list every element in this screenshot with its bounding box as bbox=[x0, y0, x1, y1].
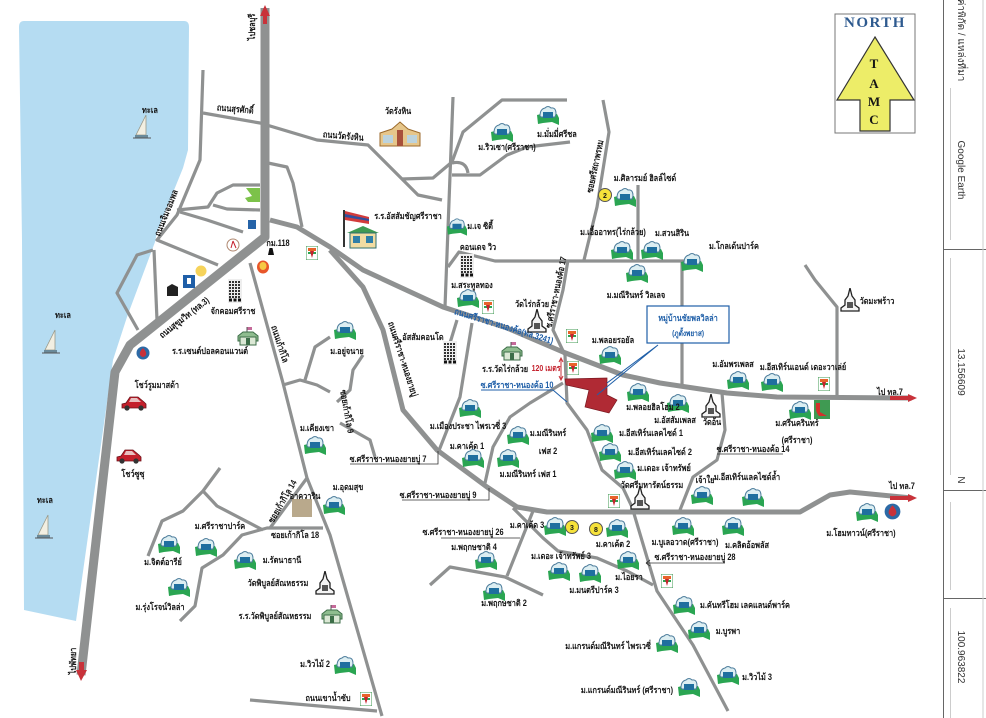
soi 10 blue label bbox=[481, 379, 567, 402]
places: temples and schools: วัดอ้น bbox=[703, 416, 722, 427]
places: housing estates: ม.อยู่จนาย bbox=[330, 346, 364, 357]
icons: fuel, banks and landmarks: คอนเดจ วิว bbox=[460, 242, 497, 252]
north arrow TAMC logo: C bbox=[869, 112, 879, 127]
places: housing estates: ม.เดอะ เจ้าทรัพย์ 3 bbox=[531, 550, 591, 561]
labels: roads: ถนนสุรศักดิ์ bbox=[216, 99, 256, 117]
labels: roads: ซ.ศรีราชา-หนองยายบู่ 9 bbox=[400, 489, 477, 501]
places: housing estates: ม.วิวไม้ 3 bbox=[742, 671, 772, 682]
labels: sea: ทะเล bbox=[142, 105, 158, 115]
icons: sailing boats bbox=[35, 115, 151, 538]
places: housing estates: ม.อีสเทิร์นเลคไซด์ล้ำ bbox=[714, 469, 780, 482]
north arrow TAMC logo: T bbox=[870, 56, 879, 71]
labels: sea bbox=[37, 105, 158, 505]
labels: roads: ถนนศรีราชา-หนองค้อ(ทล.3241) bbox=[453, 306, 555, 346]
places: housing estates: ม.เจ ซิตี้ bbox=[467, 218, 494, 231]
places: housing estates: ม.อีสเทิร์นเลคไซด์ 1 bbox=[619, 427, 683, 438]
places: temples and schools: วัดพิบูลย์สัณหธรรม bbox=[248, 577, 308, 589]
labels: roads: ซ.ศรีราชา-หนองยายบู่ 28 bbox=[655, 551, 736, 563]
icons: fuel, banks and landmarks: โชว์รูมมาสด้า bbox=[134, 379, 179, 391]
places: housing estates: ม.คาเค้ต 2 bbox=[596, 538, 631, 549]
places: housing estates: ม.อัสสัมเพลส bbox=[654, 415, 697, 425]
places: housing estates: ม.อัมพรเพลส bbox=[712, 359, 755, 369]
places: housing estates: ม.โกลเด้นปาร์ค bbox=[709, 240, 759, 251]
places: housing estates: ม.เมืองประชา ไพรเวซี่ 3 bbox=[430, 419, 507, 431]
labels: roads: ถนนเจิมจอมพล bbox=[153, 188, 180, 238]
labels: roads: ถนนศรีราชา-หนองยายบู่ bbox=[385, 320, 420, 398]
project callout box: หมู่บ้านชัยพลวิลล่า bbox=[658, 312, 718, 324]
places: housing estates: ม.ศรีนครินทร์ bbox=[775, 417, 819, 428]
places: housing estates: ม.อีสเทิร์นเลคไซด์ 2 bbox=[628, 446, 692, 457]
places: housing estates: ม.อีสเทิร์นเอนด์ เดอะวาเล่ย์ bbox=[760, 361, 846, 372]
places: temples and schools: ร.ร.วัดไร่กล้วย bbox=[482, 363, 528, 374]
places: housing estates: ม.ไอยรา bbox=[615, 571, 643, 582]
places: housing estates: ม.แกรนด์มณีรินทร์ ไพรเวซี่ bbox=[565, 639, 651, 651]
places: housing estates: ม.มณีรินทร์ bbox=[530, 427, 567, 438]
north arrow TAMC logo: M bbox=[868, 94, 880, 109]
icon: Assumption school with Thai flag bbox=[343, 210, 379, 248]
places: housing estates: ม.ศิลารมย์ ฮิลล์ไซด์ bbox=[614, 172, 676, 183]
places: temples and schools: วัดมะพร้าว bbox=[860, 295, 895, 306]
places: temples and schools bbox=[172, 106, 895, 623]
labels: roads: ถนนเก้ากิโล bbox=[269, 324, 291, 364]
labels: roads: ซ.ศรีราชา-หนองค้อ 17 bbox=[543, 255, 569, 329]
places: housing estates: ม.มณีรินทร์ วิลเลจ bbox=[607, 289, 665, 300]
places: housing estates: ม.มั่มมี่ศรีชล bbox=[537, 127, 577, 139]
places: housing estates: ม.แกรนด์มณีรินทร์ (ศรีราชา) bbox=[581, 684, 673, 695]
places: temples and schools: วัดศรีมหารัตน์ธรรม bbox=[621, 479, 683, 490]
labels: roads: ถนนวัดรังหิน bbox=[322, 130, 364, 143]
north arrow TAMC logo: A bbox=[869, 76, 879, 91]
road network bbox=[117, 70, 912, 716]
labels: sea: ทะเล bbox=[55, 310, 71, 320]
labels: roads: ซอยเก้ากิโล 18 bbox=[271, 529, 319, 540]
sidebar frame and metadata: N bbox=[955, 476, 966, 484]
project callout box bbox=[597, 306, 729, 395]
labels: roads: ถนนเขาน้ำซับ bbox=[305, 690, 351, 703]
icons: fuel, banks and landmarks: 8 bbox=[594, 527, 598, 534]
places: temples and schools: วัดไร่กล้วย bbox=[515, 298, 549, 309]
soi 10 blue label: ซ.ศรีราชา-หนองค้อ 10 bbox=[481, 379, 554, 390]
labels: roads: ถนนสุขุมวิท (ทล.3) bbox=[157, 295, 212, 341]
places: housing estates: ม.คลิตอ้อพลัส bbox=[725, 539, 770, 550]
places: housing estates: ม.เคียงเขา bbox=[300, 422, 334, 433]
icons: condominium towers bbox=[228, 254, 474, 365]
places: housing estates: เจ้าใย bbox=[696, 474, 715, 485]
distance callout: 120 metres bbox=[532, 358, 563, 380]
project callout box: (ภูตั้งพยาส) bbox=[672, 326, 705, 339]
places: housing estates: ม.คาเค้ด 1 bbox=[450, 440, 485, 451]
north arrow TAMC logo: NORTH bbox=[844, 15, 906, 31]
places: housing estates: ม.คันทรีโฮม เลคแลนด์พาร์ค bbox=[700, 599, 790, 610]
labels: sea: ทะเล bbox=[37, 495, 53, 505]
icons: fuel, banks and landmarks: 2 bbox=[603, 193, 607, 200]
places: housing estates: ม.บูเลอวาด(ศรีราชา) bbox=[652, 536, 719, 548]
labels: roads: ซอยเก้ากิโล 14 bbox=[265, 477, 299, 525]
icons: fuel, banks and landmarks bbox=[117, 188, 900, 536]
places: housing estates: ม.รัตนาธานี bbox=[263, 554, 302, 565]
places: housing estates: ม.พลอยรอยัล bbox=[592, 335, 634, 345]
places: housing estates: ม.เอื้ออาทร(ไร่กล้วย) bbox=[580, 224, 646, 237]
places: housing estates: ม.พฤกษชาติ 2 bbox=[481, 598, 527, 608]
project plot bbox=[565, 378, 617, 413]
places: housing estates: ม.รุ่งโรจน์วิลล่า bbox=[135, 601, 185, 613]
soi pointer lines bbox=[350, 451, 783, 566]
distance callout: 120 metres: 120 เมตร bbox=[532, 363, 561, 373]
labels: roads: ซ.ศรีราชา-หนองค้อ 14 bbox=[717, 443, 790, 454]
sea bbox=[19, 21, 189, 621]
labels: roads: ไป ทล.7 bbox=[876, 386, 903, 397]
places: housing estates: ม.จิตต์อารีย์ bbox=[144, 556, 182, 567]
places: housing estates: ม.สระทูลทอง bbox=[451, 280, 493, 291]
places: temples and schools: วัดรังหิน bbox=[385, 106, 412, 116]
sidebar frame and metadata: 100.963822 bbox=[955, 631, 966, 684]
places: housing estates: ม.มนตรีปาร์ค 3 bbox=[569, 584, 619, 595]
places: housing estates: ม.โฮมทาวน์(ศรีราชา) bbox=[826, 527, 896, 538]
places: housing estates: ม.ศรีราชาปาร์ค bbox=[195, 520, 245, 531]
places: housing estates bbox=[135, 106, 896, 697]
sidebar frame and metadata bbox=[943, 0, 986, 718]
icons: fuel, banks and landmarks: โชว์ซูซุ bbox=[120, 468, 145, 480]
icons: fuel, banks and landmarks: จักคอมศรีราช bbox=[211, 305, 256, 316]
labels: roads: ซ.ศรีราชา-หนองยายบู่ 7 bbox=[350, 453, 427, 465]
places: housing estates: ม.ริวเซา(ศรีราชา) bbox=[478, 141, 536, 152]
icons: fuel, banks and landmarks: 3 bbox=[570, 525, 574, 532]
places: housing estates: ม.พลอยฮิลโฮม 2 bbox=[626, 401, 680, 412]
places: housing estates: ม.สวนสิริน bbox=[655, 228, 689, 238]
places: housing estates: ม.เดอะ เจ้าทรัพย์ bbox=[637, 462, 691, 473]
icons: fuel, banks and landmarks: อาควาริน bbox=[290, 491, 321, 501]
places: temples and schools: ร.ร.อัสสัมชัญศรีราชา bbox=[374, 210, 442, 222]
places: housing estates: ม.อุดมสุข bbox=[333, 482, 364, 493]
places: housing estates: ม.คาเค้ด 3 bbox=[510, 519, 545, 530]
labels: roads: ซอยเก้ากิโล 9 bbox=[338, 389, 356, 434]
icons: fuel, banks and landmarks: อัสสัมคอนโด bbox=[402, 331, 444, 342]
sidebar frame and metadata: Google Earth bbox=[955, 141, 966, 199]
labels: roads: ไป ทล.7 bbox=[888, 480, 915, 491]
icons: 7-Eleven stores bbox=[306, 246, 830, 706]
places: housing estates: ม.พฤกษชาติ 4 bbox=[451, 542, 497, 552]
sidebar frame and metadata: 13.156609 bbox=[955, 348, 966, 396]
north arrow TAMC logo bbox=[835, 14, 915, 133]
places: housing estates: (ศรีราชา) bbox=[782, 434, 813, 445]
sidebar frame and metadata: ค่าพิกัด / แหล่งที่มา bbox=[955, 0, 969, 81]
labels: roads: ไปชลบุรี bbox=[246, 13, 258, 41]
icon: Wat Rang Hin temple bbox=[380, 122, 420, 146]
places: housing estates: ม.วิวไม้ 2 bbox=[300, 658, 330, 669]
labels: roads: ซ.ศรีราชา-หนองยายบู่ 26 bbox=[423, 526, 504, 538]
places: temples and schools: ร.ร.วัดพิบูลย์สัณหธรรม bbox=[239, 610, 311, 622]
icons: fuel, banks and landmarks: กม.118 bbox=[266, 238, 290, 248]
labels: roads: ไปพัทยา bbox=[67, 648, 78, 675]
places: housing estates: เฟส 2 bbox=[539, 446, 558, 456]
places: housing estates: ม.บูรพา bbox=[716, 626, 740, 637]
places: housing estates: ม.มณีรินทร์ เฟส 1 bbox=[500, 468, 557, 479]
labels: roads: ซอยศรีสถาพรหม bbox=[584, 139, 606, 194]
places: temples and schools: ร.ร.เซนต์ปอลคอนแวนต์ bbox=[172, 345, 248, 356]
